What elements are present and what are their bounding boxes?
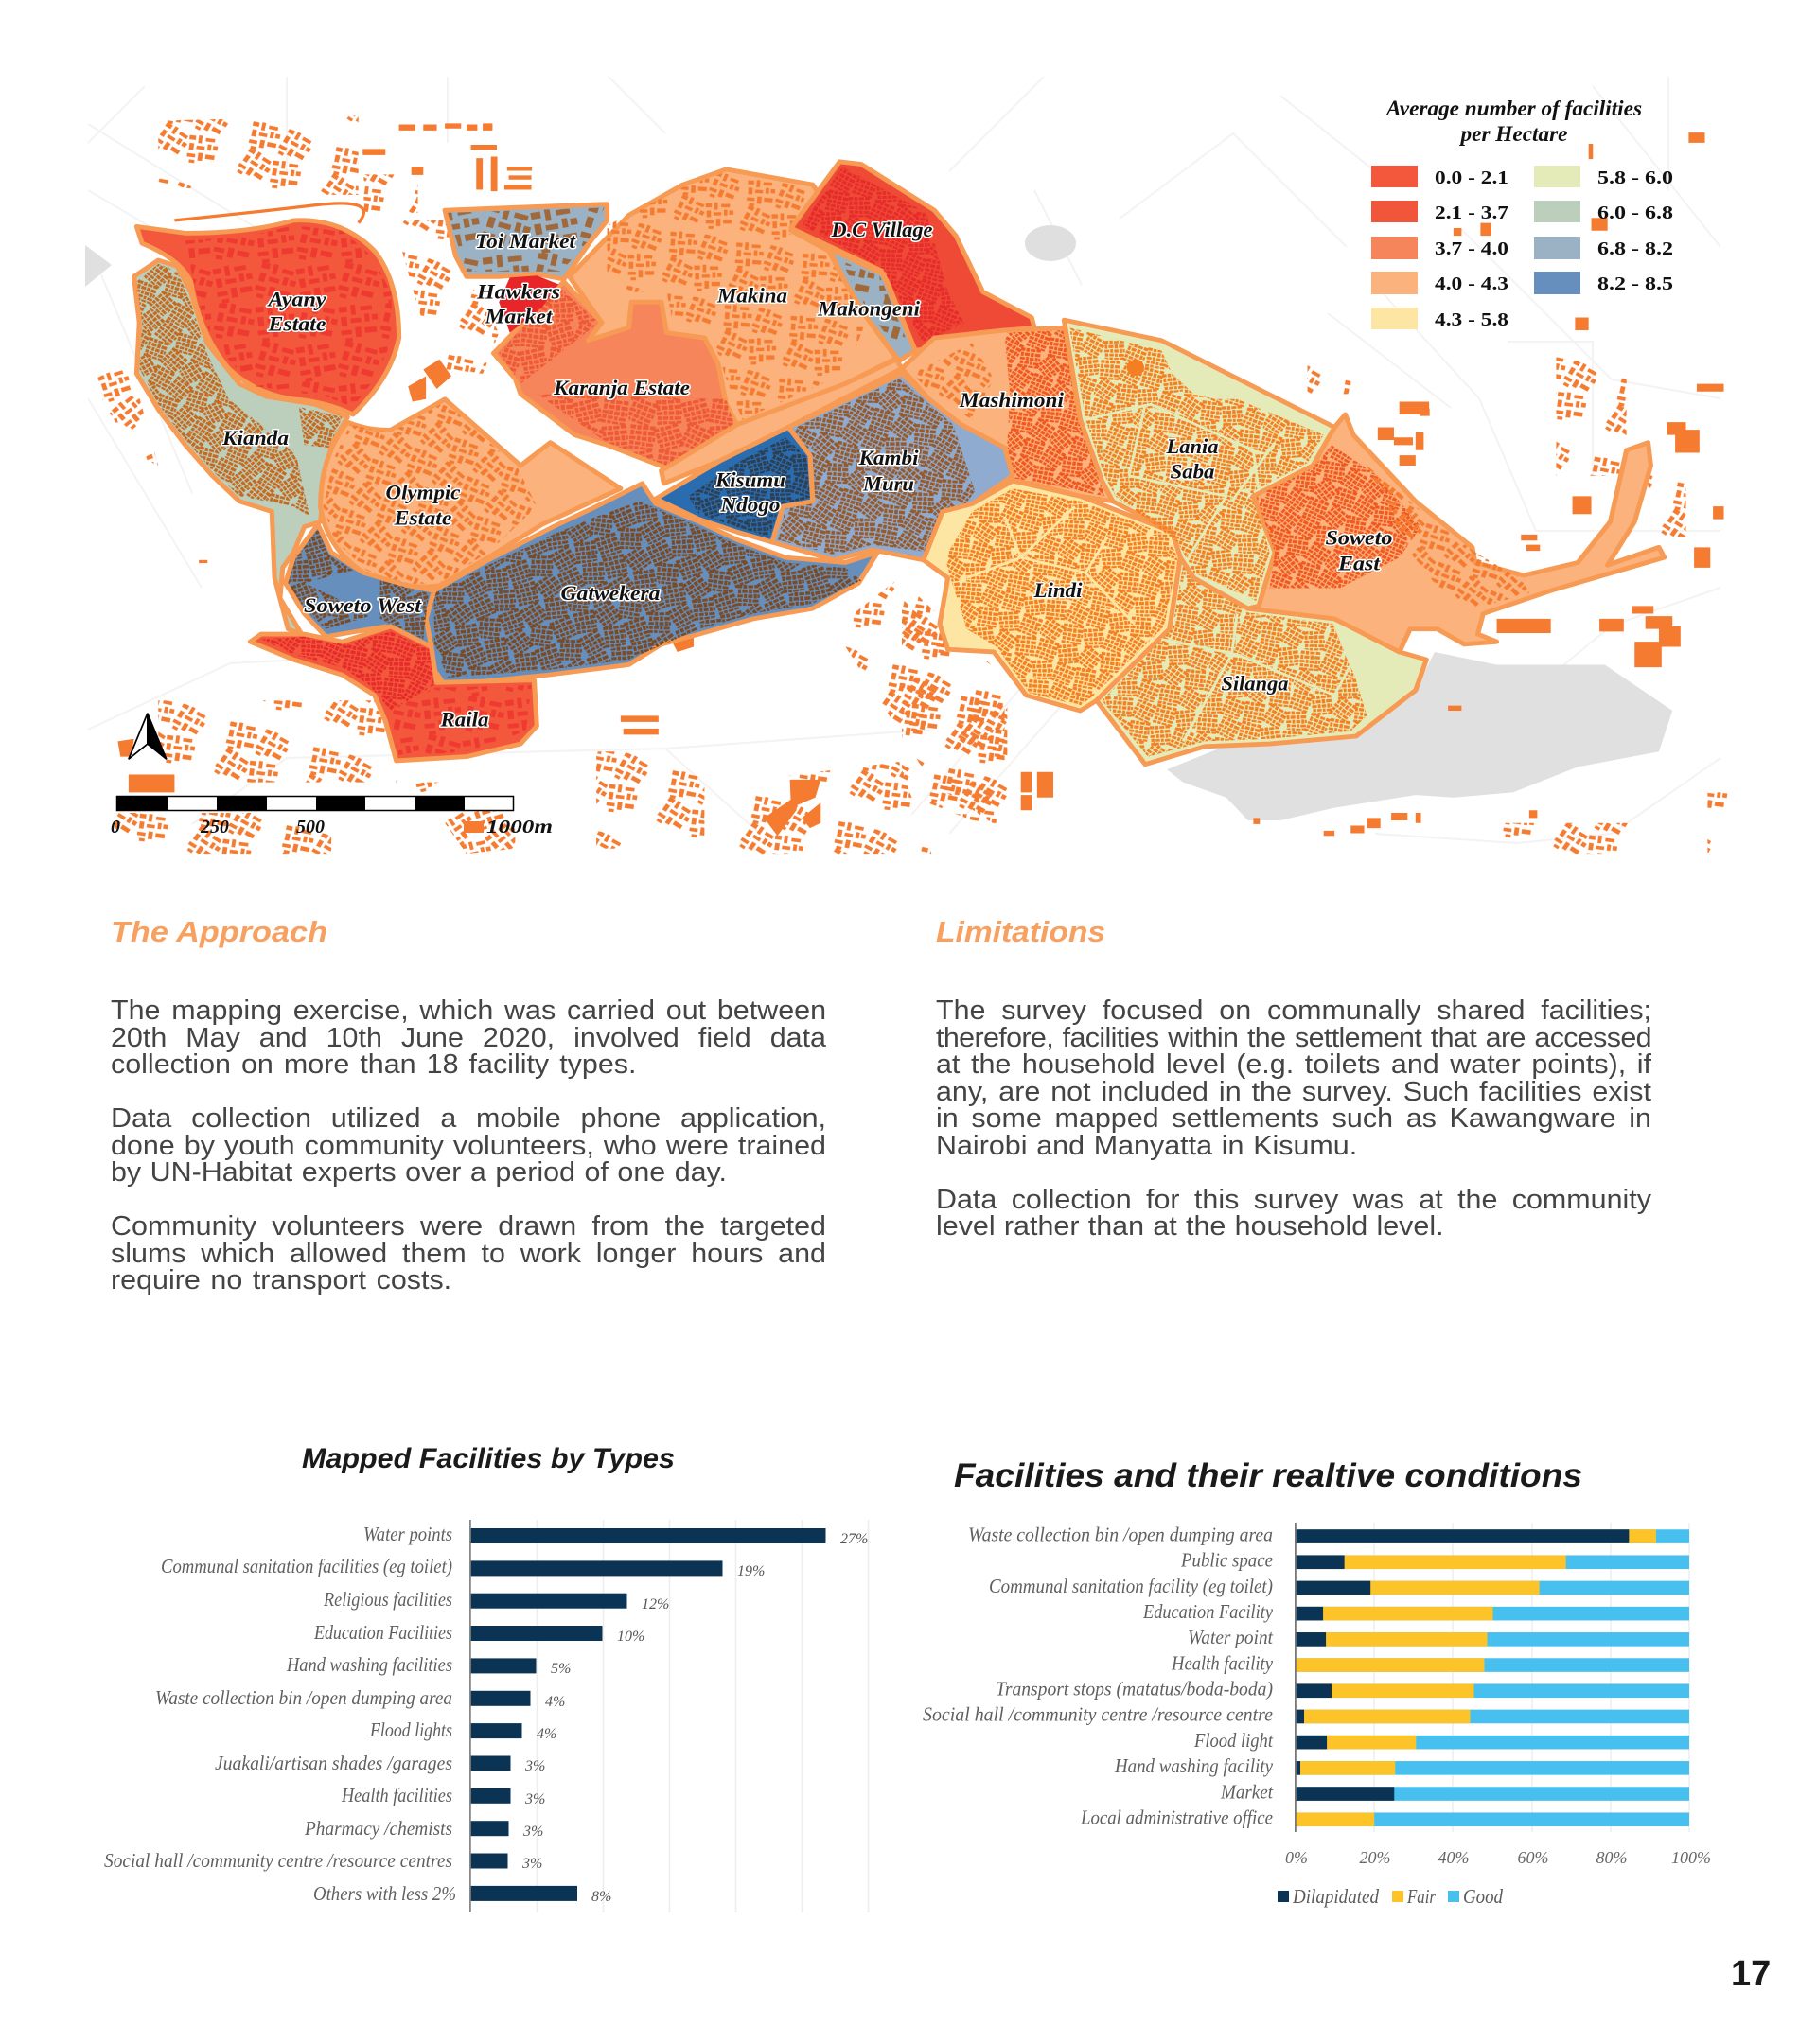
north arrow: [129, 714, 167, 759]
region: Soweto East: [1248, 414, 1665, 652]
x axis labels: [1285, 1848, 1711, 1867]
chart legend: [1278, 1885, 1503, 1908]
value labels: 3%: [524, 1791, 545, 1807]
map labels: Silanga: [1221, 671, 1288, 695]
x axis labels: 80%: [1596, 1848, 1628, 1867]
legend values: 2.1 - 3.7: [1435, 203, 1508, 223]
scale bar: 500: [296, 817, 325, 837]
legend values: 5.8 - 6.0: [1597, 167, 1673, 188]
region: Makongeni: [829, 249, 915, 361]
text block: The Approach: collection on more than 18 facility types.: [111, 1049, 636, 1080]
region: Soweto West: [286, 524, 434, 647]
region: Raila: [250, 626, 537, 761]
category labels: Waste collection bin /open dumping area: [968, 1523, 1273, 1546]
road network: [88, 77, 1720, 843]
chart legend: Good: [1463, 1885, 1503, 1908]
map labels: Karanja Estate: [553, 376, 690, 399]
category labels: Transport stops (matatus/boda-boda): [996, 1677, 1273, 1700]
map labels: Hawkers: [476, 279, 560, 303]
map labels: Lania: [1165, 434, 1219, 458]
map labels: Toi Market: [475, 229, 576, 253]
category labels: Communal sanitation facility (eg toilet): [989, 1575, 1273, 1597]
map labels: Kambi: [857, 446, 919, 469]
category labels: Hand washing facilities: [286, 1653, 452, 1676]
region: Mashimoni: [902, 327, 1113, 502]
value labels: 4%: [545, 1694, 565, 1710]
surrounding buildings: [94, 115, 1007, 854]
scale bar: 250: [200, 817, 229, 837]
scale bar: 1000m: [486, 817, 553, 837]
text block: The Approach: slums which allowed them to work longer hours and: [111, 1239, 826, 1269]
value labels: 27%: [840, 1531, 868, 1547]
heading: The Approach: The Approach: [111, 915, 327, 948]
grey edge shape: [85, 245, 112, 287]
map labels: Makina: [716, 283, 787, 307]
map labels: [221, 218, 1392, 731]
map labels: Ayany: [266, 287, 326, 310]
x axis labels: 100%: [1671, 1848, 1711, 1867]
pond: [1025, 225, 1076, 261]
gridlines: [1374, 1523, 1689, 1832]
region: D.C Village: [791, 162, 1034, 351]
category labels: Juakali/artisan shades /garages: [215, 1752, 452, 1774]
value labels: 8%: [591, 1889, 611, 1905]
chart: Mapped Facilities by Types: [104, 1443, 869, 1912]
map labels: Olympic: [386, 480, 461, 503]
category labels: Education Facilities: [313, 1621, 452, 1644]
region: Toi Market: [445, 204, 608, 279]
map labels: Soweto West: [304, 593, 422, 617]
region: Olympic Estate: [321, 399, 621, 587]
map labels: Raila: [439, 707, 488, 731]
map legend: per Hectare: [1458, 122, 1567, 146]
legend values: 3.7 - 4.0: [1435, 238, 1508, 259]
region: Kambi Muru: [772, 374, 1013, 560]
text block: The Approach: Data collection utilized a mobile phone application,: [111, 1103, 826, 1134]
text block: The Approach: The mapping exercise, which was carried out between: [111, 996, 826, 1026]
map labels: Soweto: [1325, 526, 1392, 550]
category labels: Flood lights: [369, 1718, 452, 1741]
legend values: 4.3 - 5.8: [1435, 309, 1508, 330]
value labels: 4%: [537, 1726, 556, 1742]
value labels: 19%: [737, 1563, 765, 1579]
text block: Limitations: The survey focused on communally shared facilities;: [936, 996, 1651, 1026]
category labels: Waste collection bin /open dumping area: [155, 1686, 452, 1709]
category labels: Flood light: [1193, 1729, 1274, 1752]
region: Gatwekera: [426, 484, 877, 685]
text block: Limitations: therefore, facilities within the settlement that are accessed: [936, 1023, 1651, 1053]
category labels: Communal sanitation facilities (eg toilet): [161, 1555, 452, 1577]
region: Ayany Estate: [136, 220, 399, 414]
legend swatches: [1371, 166, 1580, 329]
map labels: Muru: [862, 471, 914, 495]
x axis labels: 20%: [1359, 1848, 1391, 1867]
value labels: 5%: [551, 1661, 571, 1677]
category labels: Water point: [1188, 1626, 1274, 1648]
region: Kisumu Ndogo: [656, 427, 813, 542]
text block: The Approach: [111, 996, 826, 1295]
text block: Limitations: Data collection for this survey was at the community: [936, 1185, 1651, 1215]
axis: [469, 1520, 471, 1912]
region: Lindi: [924, 481, 1183, 711]
category labels: Health facilities: [341, 1784, 452, 1806]
x axis labels: 60%: [1518, 1848, 1548, 1867]
text block: Limitations: at the household level (e.g. toilets and water points), if: [936, 1049, 1651, 1080]
map labels: Estate: [267, 312, 326, 336]
value labels: 12%: [642, 1596, 669, 1612]
map labels: Market: [484, 304, 553, 328]
chart title: Mapped Facilities by Types: [302, 1443, 675, 1474]
lake: [1167, 652, 1672, 820]
map background: [85, 73, 1724, 852]
map labels: Kianda: [221, 426, 289, 449]
x axis labels: 0%: [1285, 1848, 1308, 1867]
map labels: Lindi: [1032, 578, 1083, 602]
category labels: Education Facility: [1142, 1600, 1274, 1623]
region: Silanga: [1097, 557, 1426, 765]
legend values: 8.2 - 8.5: [1597, 273, 1673, 294]
axis: [1295, 1523, 1297, 1832]
category labels: [923, 1523, 1274, 1828]
x axis labels: 40%: [1438, 1848, 1469, 1867]
map labels: Kisumu: [714, 467, 785, 491]
region: Makina: [570, 169, 896, 425]
text block: The Approach: 20th May and 10th June 2020, involved field data: [111, 1023, 826, 1053]
map labels: Mashimoni: [959, 388, 1065, 412]
region: Hawkers Market: [499, 275, 558, 333]
value labels: 3%: [524, 1758, 545, 1774]
category labels: Market: [1220, 1780, 1274, 1803]
bars: [471, 1528, 825, 1901]
map labels: Gatwekera: [561, 581, 661, 605]
scale bar: 0: [111, 817, 120, 837]
stacked bars: [1296, 1529, 1689, 1826]
chart legend: Fair: [1406, 1885, 1437, 1908]
text block: The Approach: by UN-Habitat experts over a period of one day.: [111, 1157, 727, 1188]
settlement regions: [134, 162, 1113, 761]
category labels: [104, 1523, 456, 1905]
map labels: East: [1337, 552, 1381, 575]
map: [85, 73, 1729, 854]
category labels: Pharmacy /chemists: [304, 1817, 452, 1840]
text block: Limitations: any, are not included in the survey. Such facilities exist: [936, 1077, 1651, 1107]
category labels: Public space: [1180, 1549, 1273, 1572]
page number: 17: [1731, 1954, 1771, 1994]
text block: The Approach: done by youth community volunteers, who were trained: [111, 1131, 826, 1161]
category labels: Others with less 2%: [313, 1882, 456, 1905]
category labels: Health facility: [1171, 1651, 1274, 1674]
heading: Limitations: Limitations: [936, 915, 1105, 948]
map labels: Estate: [393, 505, 452, 529]
map labels: Ndogo: [719, 492, 780, 516]
text block: Limitations: in some mapped settlements such as Kawangware in: [936, 1103, 1651, 1134]
category labels: Social hall /community centre /resource centre: [923, 1703, 1273, 1726]
legend values: 6.0 - 6.8: [1597, 203, 1673, 223]
legend values: 4.0 - 4.3: [1435, 273, 1508, 294]
chart: Facilities and their relative conditions: [923, 1457, 1711, 1908]
category labels: Water points: [363, 1523, 452, 1545]
value labels: 3%: [522, 1824, 543, 1840]
text block: The Approach: Community volunteers were drawn from the targeted: [111, 1211, 826, 1242]
category labels: Social hall /community centre /resource centres: [104, 1849, 452, 1872]
text block: Limitations: [936, 996, 1651, 1242]
region: Kianda: [134, 260, 347, 634]
gridlines: [538, 1520, 869, 1912]
text block: The Approach: require no transport costs.: [111, 1265, 451, 1295]
category labels: Religious facilities: [323, 1588, 452, 1611]
value labels: [521, 1531, 868, 1905]
region: Karanja Estate: [494, 282, 737, 468]
region: road strip: [662, 360, 902, 484]
chart title: Facilities and their realtive conditions: [954, 1457, 1582, 1494]
map legend: [1371, 97, 1673, 330]
category labels: Local administrative office: [1080, 1806, 1273, 1828]
legend values: 0.0 - 2.1: [1435, 167, 1508, 188]
map labels: D.C Village: [830, 218, 933, 241]
value labels: 3%: [521, 1856, 542, 1872]
map labels: Saba: [1171, 459, 1215, 483]
chart legend: Dilapidated: [1292, 1885, 1379, 1908]
text block: Limitations: level rather than at the household level.: [936, 1211, 1444, 1242]
map labels: Makongeni: [817, 296, 921, 321]
region: Lania Saba: [1064, 320, 1334, 608]
text block: Limitations: Nairobi and Manyatta in Kisumu.: [936, 1131, 1357, 1161]
value labels: 10%: [617, 1629, 644, 1645]
category labels: Hand washing facility: [1114, 1754, 1274, 1777]
legend values: [1435, 167, 1673, 330]
legend title: Average number of facilities: [1385, 97, 1642, 120]
scale bar: [111, 796, 553, 837]
legend values: 6.8 - 8.2: [1597, 238, 1673, 259]
